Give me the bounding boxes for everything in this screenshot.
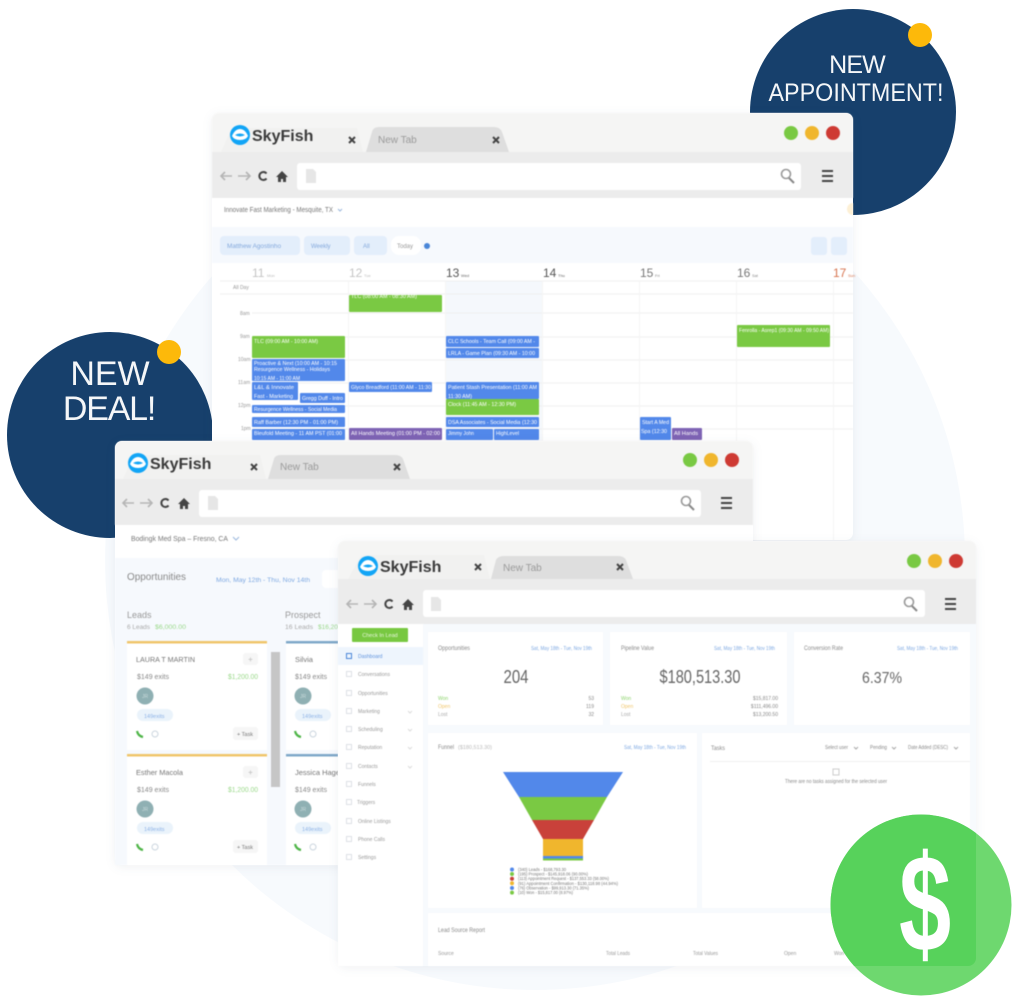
calendar toolbar [212, 227, 853, 263]
calendar grid [220, 281, 853, 540]
funnel legend: (113) Appointment Request - $137,553.33 (58.00%) [518, 876, 609, 881]
card: laura: $149 exits [137, 674, 169, 681]
card: esther: 149exits [144, 827, 165, 833]
calendar time labels: All Day [233, 285, 249, 291]
card: esther: $149 exits [137, 787, 169, 794]
window controls [784, 126, 840, 140]
url bar [199, 490, 701, 517]
calendar events: LRLA - Game Plan (09:30 AM - 10:00 [448, 351, 535, 357]
calendar events: Bleufold Meeting - 11 AM PST (01:00 [254, 431, 342, 437]
navigation icons [347, 597, 956, 611]
calendar day headers: Thu [558, 273, 565, 278]
card: silvia: Silvia [295, 655, 314, 664]
calendar events: Gregg Duff - Intro [302, 396, 343, 402]
browser window: opportunities [115, 441, 753, 865]
stat card: opportunities: 32 [588, 712, 594, 718]
lead source report card: Won [834, 951, 844, 957]
stat card: opportunities: Lost [438, 712, 448, 718]
deal badge dot [157, 340, 181, 364]
stat card: opportunities: 204 [504, 667, 528, 687]
calendar events: TLC (08:00 AM - 08:30 AM) [351, 294, 417, 300]
stat card: opportunities [428, 632, 603, 725]
stat card: pipeline value: $15,817.00 [753, 696, 778, 702]
account header: Bodingk Med Spa – Fresno, CA [131, 534, 228, 543]
calendar time labels: 12pm [238, 403, 251, 409]
calendar day headers [252, 266, 855, 280]
window chrome [212, 113, 853, 198]
logo: SkyFish [150, 456, 211, 473]
tasks card [702, 733, 970, 908]
badge: dollar [830, 814, 1012, 996]
calendar events: HighLevel [496, 431, 519, 437]
account header: Innovate Fast Marketing - Mesquite, TX [224, 207, 333, 214]
calendar day headers: 12 [349, 266, 363, 280]
calendar events: Start A Med [642, 420, 669, 426]
calendar events: Clock (11:45 AM - 12:30 PM) [448, 402, 516, 408]
calendar events: 11:30 AM) [448, 394, 472, 400]
tab label: New Tab [378, 135, 417, 146]
calendar events: DSA Associates - Social Media (12:30 [448, 420, 537, 426]
calendar day headers: 11 [252, 266, 265, 280]
calendar time labels: 1pm [241, 426, 251, 432]
scrollbar [271, 652, 280, 787]
lead source report card: Total Values [693, 951, 718, 957]
column: prospect: $16,200.00 [318, 624, 351, 631]
sidebar: Check In Lead [362, 633, 398, 639]
card: laura: JR [142, 694, 148, 700]
lead source report card: Source [438, 951, 454, 957]
funnel legend: (340) Leads - $168,793.30 [518, 867, 566, 872]
calendar events: All Hands [674, 431, 698, 437]
calendar time labels: 10am [238, 357, 251, 363]
card: esther: + [248, 768, 253, 777]
funnel card: Sat, May 18th - Tue, Nov 19th [624, 745, 686, 751]
calendar events: All Hands Meeting (01:00 PM - 02:00 [351, 431, 440, 437]
tab label: New Tab [503, 563, 542, 574]
stat card: pipeline value: Won [621, 696, 631, 702]
card: laura: $1,200.00 [228, 674, 258, 681]
calendar toolbar: Weekly [311, 244, 331, 250]
lead source report card: Total Leads [606, 951, 630, 957]
card: silvia: 149exits [302, 714, 323, 720]
card: jessica: Jessica Hagen [295, 768, 344, 777]
calendar events: Glyco Breadford (11:00 AM - 11:30 [351, 385, 431, 391]
badge: new appointment [750, 9, 956, 215]
navigation icons [221, 169, 833, 183]
funnel chart [503, 772, 623, 860]
tab label: New Tab [280, 462, 319, 473]
window chrome [338, 541, 976, 624]
url bar [297, 163, 801, 190]
stat card: conversion rate [794, 632, 970, 725]
logo [358, 556, 441, 576]
sidebar labels [357, 654, 391, 861]
stat card: pipeline value: Open [621, 704, 633, 710]
calendar events: Fenrolla - Asrep1 (09:30 AM - 09:50 AM) [739, 328, 829, 334]
badge text: APPOINTMENT! [768, 79, 944, 107]
window controls [907, 554, 963, 568]
stat card: opportunities: 119 [586, 704, 594, 710]
opportunities board [115, 558, 753, 865]
calendar events [252, 294, 830, 440]
calendar events: Jimmy John [448, 431, 474, 437]
logo: SkyFish [380, 559, 441, 576]
calendar events: Resurgence Wellness - Holidays [254, 367, 330, 373]
calendar events: TLC (09:00 AM - 10:00 AM) [254, 339, 318, 345]
stat card: pipeline value: $111,496.00 [751, 704, 778, 710]
calendar events: Spa (12:30 [641, 429, 667, 435]
tasks card: Date Added (DESC) [908, 745, 948, 751]
column: leads: Leads [127, 610, 152, 620]
card: jessica: $149 exits [295, 787, 327, 794]
sidebar labels: Opportunities [358, 691, 388, 697]
window chrome [115, 441, 753, 525]
card: silvia: $149 exits [295, 674, 327, 681]
calendar events: L&L & Innovate [254, 385, 294, 391]
stat card: pipeline value: Sat, May 18th - Tue, Nov 19th [714, 646, 775, 652]
stat card: conversion rate: 6.37% [862, 670, 902, 687]
stat card: pipeline value: Lost [621, 712, 631, 718]
logo [230, 125, 313, 145]
card: jessica [286, 754, 386, 865]
card: laura: + Task [237, 732, 253, 738]
calendar events: Raff Barber (12:30 PM - 01:00 PM) [254, 420, 338, 426]
sidebar labels: Online Listings [358, 819, 391, 825]
card: silvia [286, 641, 386, 750]
card: jessica: 149exits [302, 827, 323, 833]
card: esther: + Task [237, 845, 253, 851]
calendar day headers: 16 [737, 266, 751, 280]
calendar day headers: 17 [833, 266, 847, 280]
navigation icons [123, 496, 732, 510]
lead source report card: Open [784, 951, 796, 957]
calendar toolbar: Matthew Agostinho [227, 244, 282, 250]
funnel card: ($180,513.30) [458, 745, 492, 751]
calendar events: Resurgence Wellness - Social Media [254, 407, 338, 413]
card: esther: JR [142, 807, 148, 813]
calendar events: Fast - Marketing [254, 394, 293, 400]
calendar time labels: 9am [240, 334, 250, 340]
column: prospect: 16 Leads [285, 624, 314, 631]
calendar toolbar: All [363, 244, 370, 250]
funnel card: Funnel [438, 745, 454, 751]
card: laura: 149exits [144, 714, 165, 720]
stat card: opportunities: Sat, May 18th - Tue, Nov 19th [531, 646, 592, 652]
sidebar labels: Conversations [358, 672, 390, 678]
logo: SkyFish [252, 128, 313, 145]
column: prospect [285, 610, 386, 865]
card: esther [127, 754, 267, 865]
tasks card: Tasks [711, 746, 725, 752]
calendar events: 10:15 AM - 11:00 AM [254, 376, 300, 382]
browser window: calendar [212, 113, 855, 540]
sidebar labels: Phone Calls [358, 837, 385, 843]
deal badge text: NEW [70, 355, 150, 393]
column: leads: 6 Leads [127, 624, 151, 631]
badge: new deal [7, 332, 213, 538]
card: silvia: JR [300, 694, 306, 700]
calendar day headers: Fri [655, 273, 660, 278]
calendar time labels: 8am [240, 311, 250, 317]
funnel legend: (91) Appointment Confirmation - $130,118.98 (44.94%) [518, 881, 618, 886]
stat card: conversion rate: Conversion Rate [804, 646, 844, 652]
sidebar labels: Contacts [358, 764, 378, 770]
calendar day headers: 13 [446, 266, 460, 280]
calendar events: Patient Stash Presentation (11:00 AM [448, 385, 537, 391]
logo [128, 453, 211, 473]
column: leads: $6,000.00 [155, 624, 186, 631]
stat card: pipeline value: $13,200.50 [753, 712, 778, 718]
stat card: opportunities: 53 [588, 696, 594, 702]
stat card: pipeline value: Pipeline Value [621, 646, 655, 652]
sidebar labels: Settings [358, 855, 377, 861]
stat card: pipeline value: $180,513.30 [660, 667, 740, 687]
lead source report card: Lead Source Report [438, 928, 485, 934]
sidebar labels: Reputation [358, 745, 382, 751]
deal badge text [63, 355, 155, 428]
tasks card: There are no tasks assigned for the selected user [785, 779, 887, 785]
dollar sign: $ [899, 827, 951, 981]
funnel legend: (195) Prospect - $145,918.06 (90.00%) [518, 872, 588, 876]
calendar day headers: Sat [752, 273, 759, 278]
tasks card: Pending [870, 745, 887, 751]
sidebar labels: Dashboard [358, 654, 383, 660]
card: esther: $1,200.00 [228, 787, 258, 794]
browser window: dashboard [338, 541, 976, 966]
stat card: conversion rate: Sat, May 18th - Tue, Nov 19th [897, 646, 958, 652]
stat card: pipeline value [610, 632, 787, 725]
calendar time labels [233, 285, 251, 432]
calendar day headers: Sun [848, 273, 855, 278]
board title: Opportunities [127, 572, 186, 583]
funnel legend: (10) Won - $15,817.00 (8.97%) [518, 890, 573, 895]
calendar events: CLC Schools - Team Call (09:00 AM - [448, 339, 535, 345]
column: leads [127, 610, 267, 865]
calendar events: Proactive & Next (10:00 AM - 10:15 [254, 361, 337, 367]
sidebar labels: Scheduling [358, 727, 383, 733]
column: prospect: Prospect [285, 610, 321, 620]
calendar toolbar: Today [397, 244, 413, 250]
calendar day headers: 14 [543, 266, 557, 280]
calendar day headers: Wed [461, 273, 469, 278]
funnel legend: (76) Observation - $99,913.30 (71.35%) [518, 886, 589, 890]
card: laura: + [248, 655, 253, 664]
funnel legend [510, 867, 618, 895]
badge dot [908, 23, 932, 47]
stat card: opportunities: Open [438, 704, 450, 710]
sidebar [338, 624, 423, 966]
check in lead button [352, 628, 408, 642]
date range: Mon, May 12th - Thu, Nov 14th [216, 577, 310, 584]
badge text: NEW [829, 51, 886, 79]
card: jessica: JR [300, 807, 306, 813]
lead source report card [428, 913, 970, 966]
deal badge text: DEAL! [63, 390, 155, 428]
url bar [423, 590, 925, 617]
stat card: opportunities: Opportunities [438, 646, 470, 652]
sidebar icons [346, 654, 352, 860]
calendar day headers: Tue [364, 273, 372, 278]
sidebar labels: Marketing [358, 709, 380, 715]
card: esther: Esther Macola [136, 768, 184, 777]
window controls [683, 453, 739, 467]
badge text [768, 51, 944, 107]
sidebar labels: Funnels [358, 782, 376, 788]
calendar time labels: 11am [238, 380, 250, 386]
calendar day headers: 15 [640, 266, 654, 280]
card: laura [127, 641, 267, 750]
calendar day headers: Mon [267, 273, 275, 278]
funnel card [428, 733, 697, 908]
background circle [105, 130, 965, 990]
card: laura: LAURA T MARTIN [136, 655, 195, 664]
tasks card: Select user [825, 745, 848, 751]
sidebar labels: Triggers [357, 800, 376, 806]
stat card: opportunities: Won [438, 696, 448, 702]
